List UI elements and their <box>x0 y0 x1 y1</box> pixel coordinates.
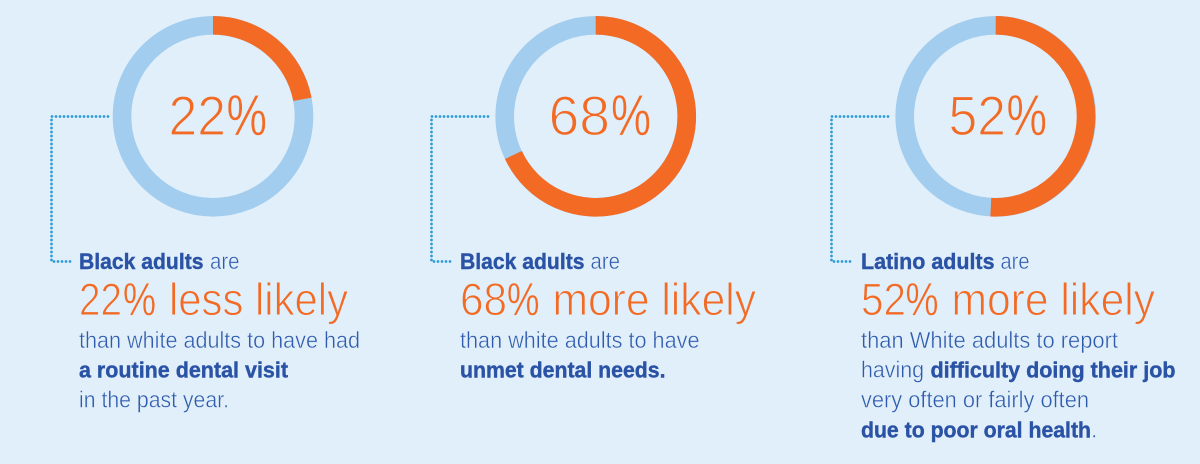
panel: Black adults routine dental visit <box>52 25 360 413</box>
donut value: 68%: % <box>611 84 651 148</box>
text block: description: than white adults to have <box>460 327 700 353</box>
donut value: 52%: % <box>1006 84 1047 148</box>
headline: 22% less likely: less likely <box>169 274 348 325</box>
dotted connector <box>52 116 108 262</box>
text block: lead-in: are <box>210 248 240 274</box>
text block: description <box>79 327 360 412</box>
text block: description: a routine dental visit <box>79 358 288 382</box>
text block: description: than White adults to report <box>861 327 1119 353</box>
donut chart: 68% <box>505 25 687 207</box>
text block: description: very often or fairly often <box>861 386 1089 412</box>
donut value: 52%: 52 <box>948 84 1006 147</box>
text block: description: due to poor oral health <box>861 418 1091 442</box>
dotted connector <box>432 116 488 262</box>
text block: lead-in: Black adults <box>79 249 204 274</box>
headline: 52% more likely: % <box>906 273 938 325</box>
donut chart: 52% <box>905 25 1087 207</box>
headline: 22% less likely: % <box>123 273 156 325</box>
text block: lead-in: Black adults <box>460 249 584 274</box>
text block: description: than white adults to have had <box>79 327 360 353</box>
donut value: 52% <box>948 84 1047 148</box>
text block: description: having <box>861 356 924 382</box>
donut value: 22%: % <box>226 84 267 148</box>
text block: description <box>460 327 700 382</box>
headline: 22% less likely: 22 <box>79 274 122 325</box>
text block: description: unmet dental needs. <box>460 358 666 382</box>
donut chart: 22% <box>122 25 304 207</box>
text block: lead-in: are <box>1000 248 1030 274</box>
text block: description: in the past year. <box>79 386 229 412</box>
headline: 68% more likely <box>460 273 756 325</box>
panel: Latino adults difficulty doing their job <box>832 25 1176 443</box>
text block: lead-in: Latino adults <box>861 249 994 274</box>
text block: description: . <box>1091 416 1097 442</box>
donut value: 68%: 68 <box>548 84 610 147</box>
headline: 52% more likely: more likely <box>952 274 1155 325</box>
headline: 68% more likely: % <box>507 273 540 325</box>
headline: 52% more likely <box>861 273 1155 325</box>
text block: lead-in: are <box>590 248 620 274</box>
donut value: 22% <box>168 84 267 148</box>
dotted connector <box>832 116 888 262</box>
headline: 68% more likely: more likely <box>552 274 756 325</box>
text block: description: difficulty doing their job <box>930 358 1176 382</box>
panel: Black adults unmet dental needs <box>432 25 756 382</box>
headline: 52% more likely: 52 <box>861 274 906 325</box>
donut value: 22%: 22 <box>168 84 226 147</box>
text block: description <box>861 327 1176 442</box>
headline: 22% less likely <box>79 273 348 325</box>
donut value: 68% <box>548 84 651 148</box>
headline: 68% more likely: 68 <box>460 274 507 325</box>
